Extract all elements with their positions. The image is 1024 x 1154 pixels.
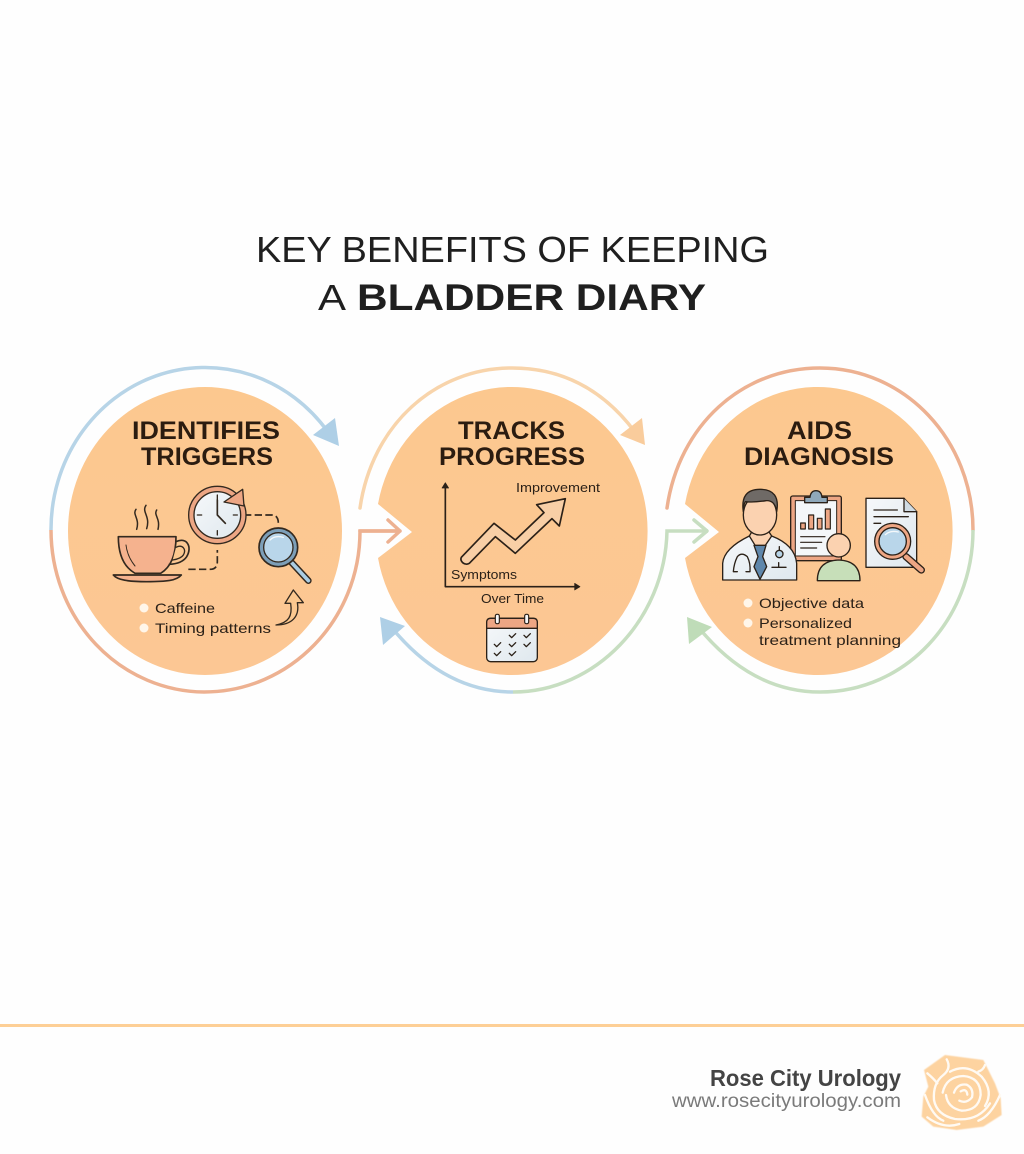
icon: dashed connectors	[188, 515, 278, 569]
heading	[439, 417, 585, 471]
icon: clock	[189, 486, 246, 544]
heading: AIDS	[787, 417, 852, 445]
bullets: objective data, personalized treatment planning: treatment planning	[759, 632, 901, 648]
icons: doctor, clipboard, patient, document	[723, 489, 921, 581]
ring arrow: light orange top	[360, 368, 645, 508]
icon: clipboard	[791, 496, 841, 561]
circle background with notch	[685, 387, 953, 675]
circle background	[68, 387, 342, 675]
heading: DIAGNOSIS	[744, 443, 894, 471]
icon: doctor	[723, 536, 797, 580]
footer brand text	[671, 1065, 901, 1112]
chart labels: Improvement	[516, 480, 600, 495]
bullets: caffeine, timing patterns	[140, 600, 271, 636]
title: BLADDER DIARY	[357, 277, 706, 318]
icon: rose logo	[922, 1055, 1002, 1130]
bullets: objective data, personalized treatment planning: Personalized	[759, 615, 852, 631]
chart labels	[451, 480, 600, 606]
ring arrow: salmon bottom	[51, 530, 400, 692]
heading: IDENTIFIES	[132, 417, 280, 445]
line chart	[442, 483, 580, 662]
icon: steam	[135, 505, 159, 529]
heading: TRIGGERS	[141, 443, 273, 471]
heading: TRACKS	[458, 417, 565, 445]
bullets: objective data, personalized treatment planning: Objective data	[759, 595, 864, 611]
ring arrow: salmon top	[667, 368, 973, 530]
ring arrow: green to blue bottom	[380, 531, 708, 692]
ring arrow: blue top	[51, 367, 339, 530]
panel: identifies triggers	[51, 367, 400, 692]
panel: tracks progress	[360, 368, 708, 692]
icon: curved arrow	[276, 590, 303, 625]
heading	[132, 417, 280, 471]
chart axes	[445, 485, 578, 587]
icon: patient	[817, 560, 860, 581]
title: KEY BENEFITS OF KEEPING	[256, 229, 769, 270]
bullets: caffeine, timing patterns: Caffeine	[155, 600, 215, 616]
icon: coffee cup	[118, 537, 176, 573]
bullets: objective data, personalized treatment planning	[744, 595, 901, 648]
bullets: caffeine, timing patterns: Timing patterns	[155, 620, 271, 636]
heading: PROGRESS	[439, 443, 585, 471]
footer brand text: Rose City Urology	[710, 1065, 901, 1091]
chevron arrow into circle 3	[694, 520, 707, 542]
title: A	[318, 277, 346, 318]
improvement arrow	[461, 499, 565, 564]
footer rule	[0, 1024, 1024, 1027]
panel: aids diagnosis	[667, 368, 973, 692]
ring arrow: green bottom	[687, 530, 973, 692]
icon: document with magnifier	[866, 498, 917, 567]
footer brand text: www.rosecityurology.com	[671, 1091, 901, 1112]
icon: calendar	[487, 618, 537, 662]
chart labels: Symptoms	[451, 567, 518, 582]
icon: magnifier	[292, 563, 308, 581]
circle background with notch	[378, 387, 648, 675]
icons: coffee cup, clock, magnifier	[113, 486, 308, 625]
chevron arrow into circle 2	[360, 520, 400, 542]
heading	[744, 417, 894, 471]
chart labels: Over Time	[481, 591, 544, 606]
title	[256, 229, 769, 318]
